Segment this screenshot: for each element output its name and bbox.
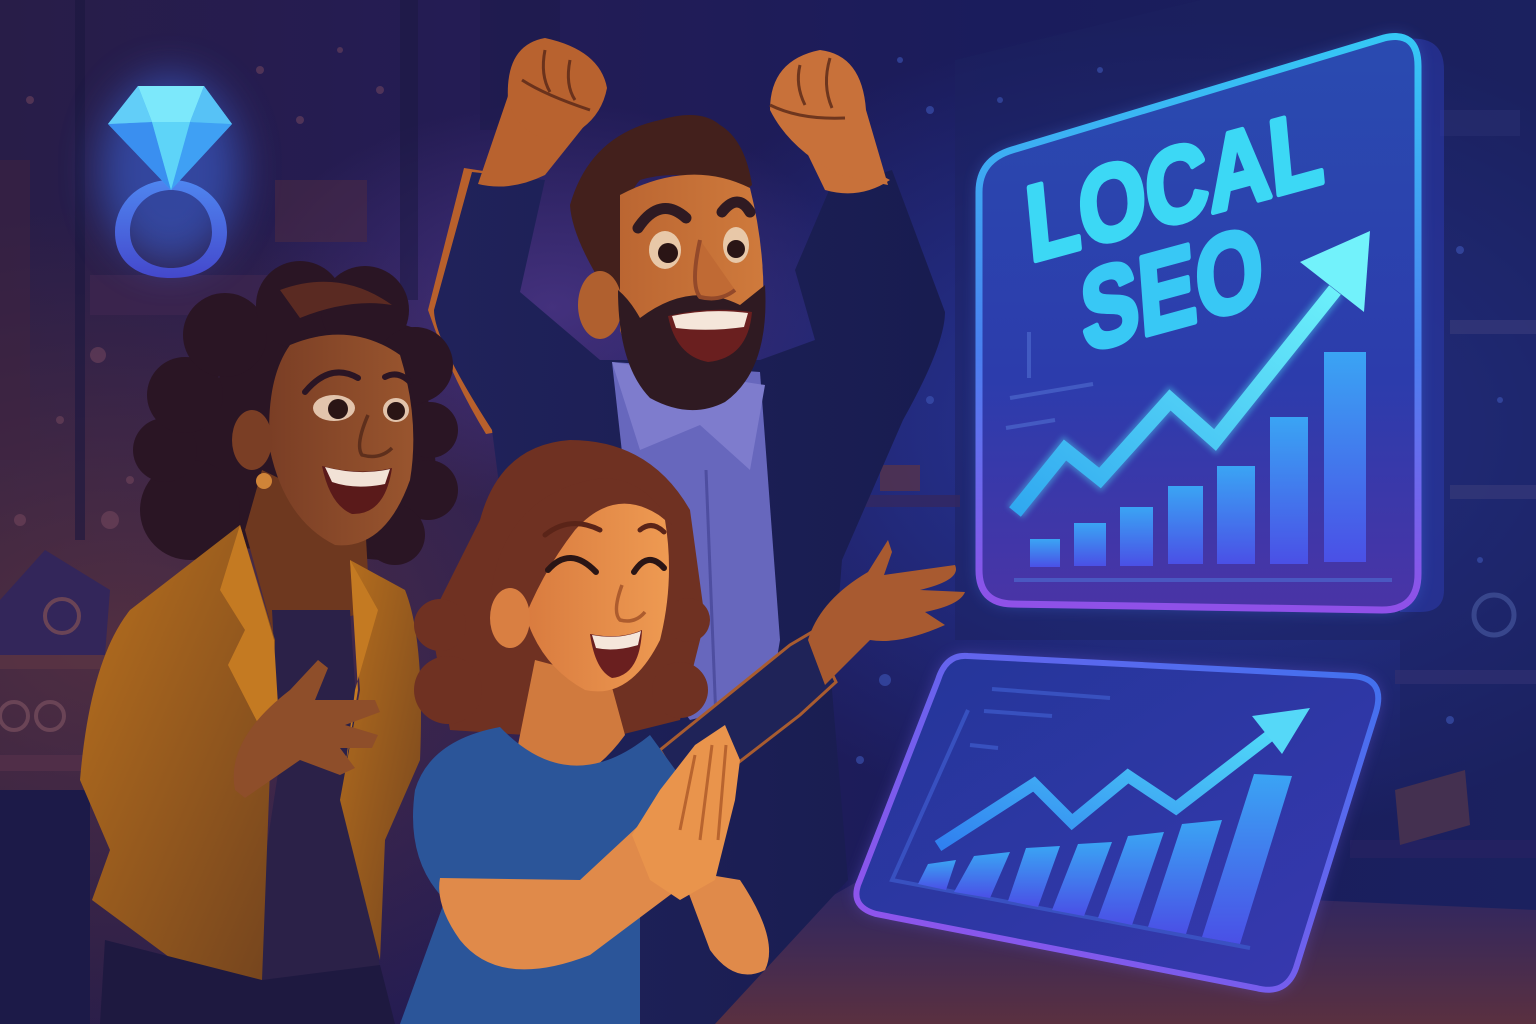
eyebrows — [305, 372, 410, 392]
jacket and raised arms — [434, 170, 945, 1024]
desk — [700, 880, 1536, 1024]
right fist and forearm — [770, 50, 890, 193]
figure: woman on the left — [80, 261, 458, 1024]
icon: glowing diamond ring — [100, 75, 240, 278]
lower body — [100, 940, 395, 1024]
dark top — [240, 610, 385, 1024]
left fist finger lines — [522, 50, 590, 110]
face — [269, 335, 413, 545]
ear and earring — [232, 410, 272, 489]
arm — [439, 815, 690, 969]
diamond — [108, 86, 232, 190]
left fist and forearm — [478, 38, 607, 187]
mouth — [590, 630, 642, 678]
neck — [515, 660, 625, 780]
faint text lines — [1006, 332, 1392, 580]
blazer — [80, 525, 275, 980]
jacket rim light — [428, 168, 510, 434]
tablet bar chart — [918, 774, 1292, 944]
mouth — [322, 466, 392, 514]
face — [620, 175, 764, 405]
tablet faint lines — [892, 689, 1250, 948]
panel heading: SEO: SEO — [1076, 201, 1267, 376]
ring band — [115, 180, 227, 278]
nose — [695, 240, 735, 298]
eyebrows — [638, 202, 750, 228]
neck — [245, 470, 370, 640]
mouth — [668, 310, 752, 362]
eyes — [649, 227, 749, 269]
beard — [618, 285, 766, 410]
bar chart — [1030, 352, 1366, 567]
panel: Local SEO holographic chart — [979, 37, 1444, 612]
panel: tablet with chart — [856, 656, 1378, 990]
closed eyes — [548, 558, 664, 572]
nose — [360, 415, 392, 456]
face — [520, 488, 669, 691]
ear — [578, 271, 622, 339]
hair — [570, 115, 752, 300]
blue shirt — [400, 727, 690, 1024]
right fist finger lines — [770, 58, 845, 118]
nose — [616, 585, 645, 621]
right arm sleeve and hand — [660, 540, 965, 800]
eyes — [313, 395, 409, 422]
hand on chest — [234, 660, 380, 798]
wavy hair — [414, 440, 710, 740]
clasped hands — [632, 725, 740, 900]
ear — [490, 588, 530, 648]
figure: man cheering — [428, 38, 965, 1024]
forearm right — [680, 870, 769, 974]
fringe — [490, 478, 672, 630]
growth arrow — [1015, 231, 1370, 512]
eyebrows — [545, 524, 664, 535]
curly hair — [133, 261, 458, 565]
shirt — [612, 362, 780, 720]
figure: woman in the centre — [400, 440, 769, 1024]
panel heading: LOCAL: LOCAL — [1021, 86, 1327, 285]
tablet growth arrow — [938, 708, 1310, 846]
